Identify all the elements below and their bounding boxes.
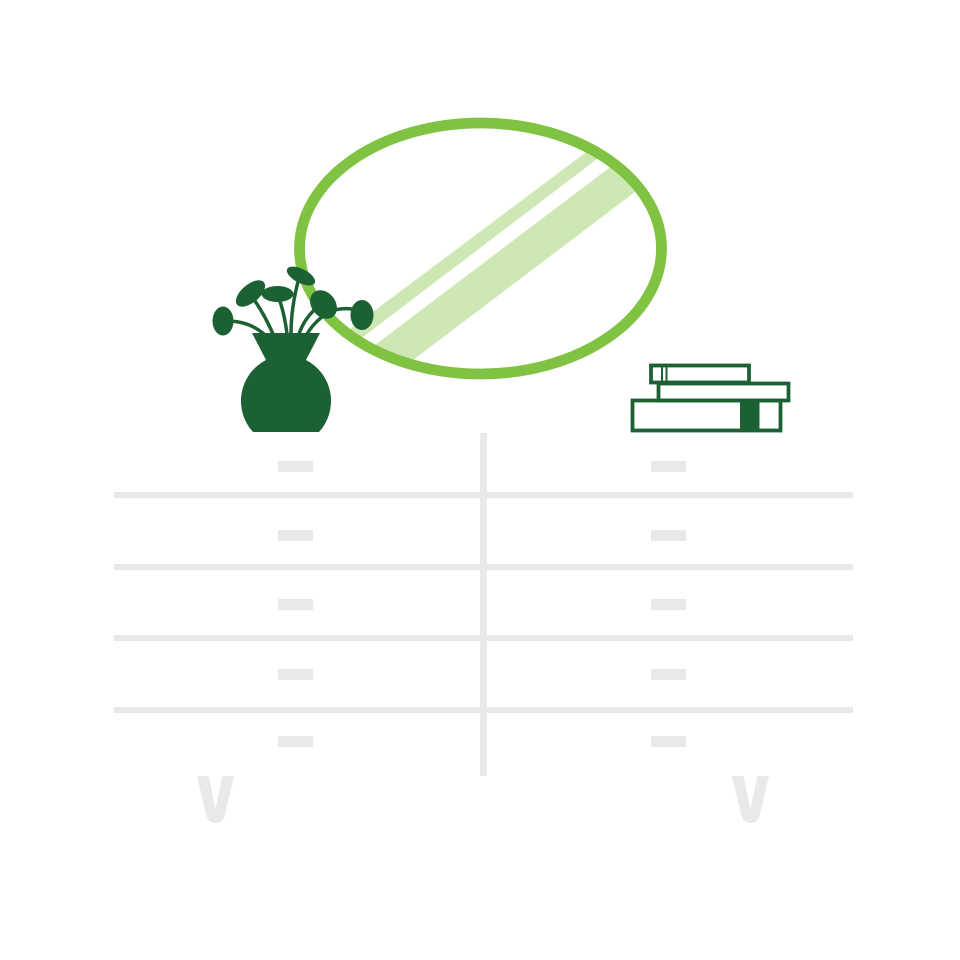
right dresser leg [732, 776, 769, 823]
top book [651, 366, 749, 382]
mirror frame [300, 123, 662, 374]
right drawer handles [651, 461, 686, 747]
plant stems [230, 278, 360, 334]
vase [241, 333, 331, 432]
plant leaves [212, 263, 374, 336]
dresser centre divider [480, 433, 487, 776]
mirror [300, 123, 662, 374]
left dresser leg [197, 776, 234, 823]
middle book [658, 384, 788, 400]
potted plant [212, 263, 374, 432]
dresser: gray line frame [114, 433, 853, 823]
mirror reflection: narrow band [348, 152, 599, 338]
stack of books [632, 366, 788, 431]
mirror reflection: wide band [373, 166, 637, 362]
left drawer handles [278, 461, 313, 747]
dresser shelf lines [114, 492, 853, 713]
bottom book [632, 400, 780, 431]
